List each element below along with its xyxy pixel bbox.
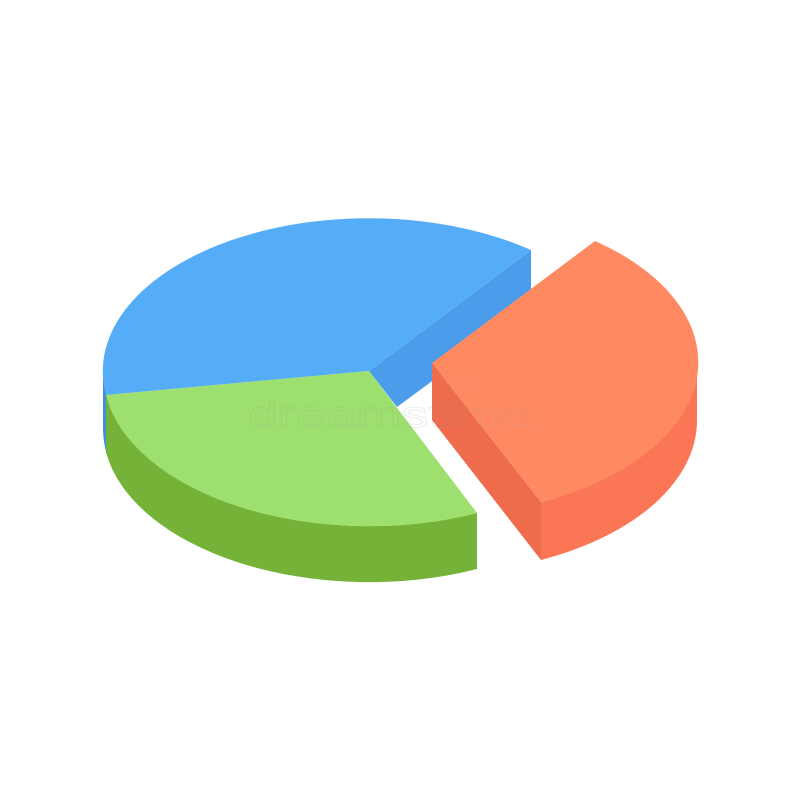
blue slice outer side sliver xyxy=(103,371,110,455)
green slice outer side xyxy=(106,395,477,582)
watermark xyxy=(248,373,546,435)
slice: blue xyxy=(103,218,531,455)
green slice top xyxy=(106,371,477,526)
orange slice cut face xyxy=(432,363,541,560)
slice: orange, pulled out xyxy=(432,241,698,560)
blue slice cut face xyxy=(369,250,531,407)
watermark text: dreamstime. xyxy=(248,394,546,435)
blue slice top xyxy=(103,218,531,395)
watermark spiral icon xyxy=(450,373,474,397)
orange slice outer side xyxy=(541,363,697,560)
slice: green xyxy=(106,371,477,582)
orange slice top xyxy=(432,241,698,502)
